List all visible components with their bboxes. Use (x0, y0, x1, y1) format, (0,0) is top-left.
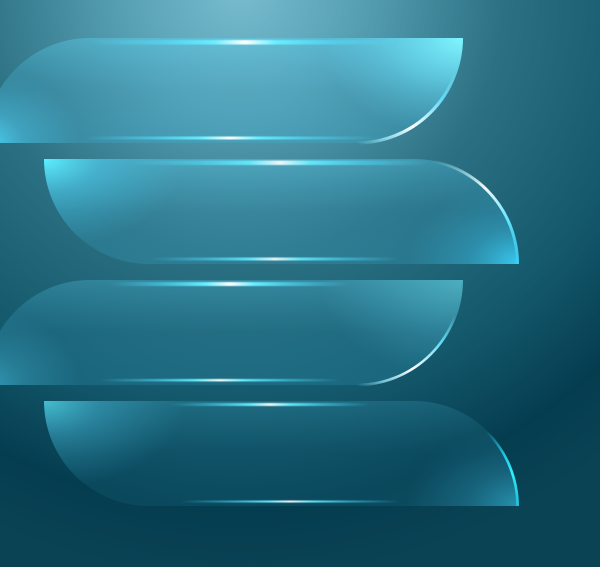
banner 3 (0, 280, 463, 385)
edge highlight (412, 401, 518, 506)
top glint (90, 40, 400, 44)
edge highlight (412, 159, 518, 264)
bottom glint (85, 136, 375, 140)
top glint (130, 160, 430, 165)
bottom glint (180, 500, 400, 502)
banner 2 (44, 159, 519, 264)
banner 4 (44, 401, 519, 506)
top glint (170, 403, 370, 406)
top glint (110, 282, 350, 286)
bottom glint (100, 379, 340, 381)
bottom glint (150, 258, 400, 260)
banner 1 (0, 38, 463, 143)
edge highlight (356, 280, 462, 385)
edge highlight (356, 38, 462, 143)
